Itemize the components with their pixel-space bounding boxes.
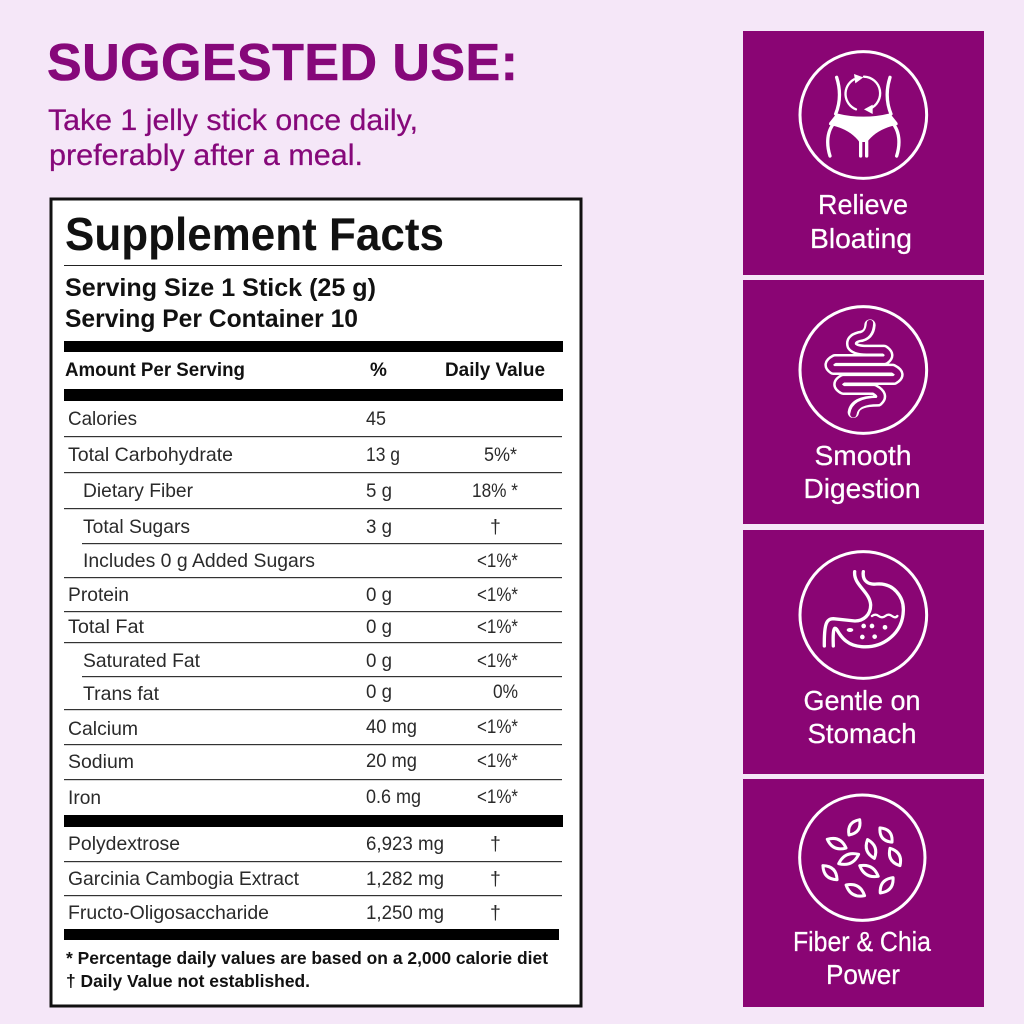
panel: smooth digestion [743, 280, 984, 524]
panel: fiber and chia power [743, 779, 984, 1007]
label: Stomach [808, 718, 916, 749]
nutrient rows: Dietary Fiber [83, 480, 193, 502]
nutrient rows: <1%* [477, 786, 518, 808]
label: Digestion [804, 473, 920, 504]
panel: supplement facts [51, 199, 581, 1006]
nutrient rows: 20 mg [366, 750, 417, 772]
label: Fiber & Chia [793, 926, 931, 957]
nutrient rows: † [490, 868, 501, 890]
nutrient rows: 0.6 mg [366, 786, 421, 808]
nutrient rows: 1,282 mg [366, 868, 444, 890]
nutrient rows: Sodium [68, 751, 134, 773]
usage instructions: preferably after a meal. [49, 139, 363, 172]
nutrient rows: 45 [366, 408, 386, 430]
nutrient rows: Total Sugars [83, 516, 190, 538]
nutrient rows: 0% [493, 681, 518, 703]
nutrient rows: 3 g [366, 516, 392, 538]
nutrient rows: 0 g [366, 584, 392, 606]
nutrient rows: Fructo-Oligosaccharide [68, 902, 269, 924]
panel: gentle on stomach [743, 530, 984, 774]
nutrient rows: Polydextrose [68, 833, 180, 855]
label: Relieve [818, 189, 908, 220]
nutrient rows: 5%* [484, 444, 517, 466]
serving information: Serving Size 1 Stick (25 g) [65, 274, 376, 302]
nutrient rows: 1,250 mg [366, 902, 444, 924]
nutrient rows [68, 408, 518, 924]
nutrient rows: † [490, 516, 501, 538]
panel: relieve bloating [743, 31, 984, 275]
nutrient rows: Total Carbohydrate [68, 444, 233, 466]
nutrient rows: Saturated Fat [83, 650, 201, 672]
nutrient rows: Garcinia Cambogia Extract [68, 868, 300, 890]
nutrient rows: <1%* [477, 716, 518, 738]
serving information [65, 274, 376, 333]
nutrient rows: 40 mg [366, 716, 417, 738]
footnotes [66, 948, 548, 991]
nutrient rows: Iron [68, 787, 101, 809]
label [804, 685, 920, 749]
nutrient rows: 5 g [366, 480, 392, 502]
nutrient rows: † [490, 902, 501, 924]
label [804, 440, 920, 504]
label [810, 189, 912, 254]
nutrient rows: 0 g [366, 681, 392, 703]
icon: chia seeds [800, 795, 925, 920]
table header: Amount Per Serving [65, 360, 245, 381]
nutrient rows: <1%* [477, 550, 518, 572]
table header: % [370, 360, 387, 381]
nutrient rows: Trans fat [83, 683, 160, 705]
nutrient rows: Total Fat [68, 616, 145, 638]
label: Smooth [814, 440, 912, 471]
icon: stomach [800, 552, 927, 678]
nutrient rows: 6,923 mg [366, 833, 444, 855]
nutrient rows: <1%* [477, 750, 518, 772]
icon: intestines [800, 307, 927, 433]
nutrient rows: <1%* [477, 616, 518, 638]
nutrient rows: 0 g [366, 650, 392, 672]
footnotes: * Percentage daily values are based on a 2,000 calorie diet [66, 948, 548, 968]
nutrient rows: Protein [68, 584, 129, 606]
label [793, 926, 931, 990]
nutrient rows: 13 g [366, 444, 400, 466]
label: Power [826, 959, 900, 990]
label: Bloating [810, 223, 912, 254]
usage instructions [48, 104, 418, 172]
serving information: Serving Per Container 10 [65, 305, 358, 333]
nutrient rows: 18% * [472, 480, 518, 502]
nutrient rows: Calcium [68, 718, 138, 740]
nutrient rows: † [490, 833, 501, 855]
nutrient rows: 0 g [366, 616, 392, 638]
facts heading: Supplement Facts [65, 208, 444, 260]
nutrient rows: Calories [68, 408, 137, 430]
table header: Daily Value [445, 360, 545, 381]
nutrient rows: <1%* [477, 650, 518, 672]
nutrient rows: Includes 0 g Added Sugars [83, 550, 315, 572]
footnotes: † Daily Value not established. [66, 971, 310, 991]
label: Gentle on [804, 685, 920, 716]
table header [65, 360, 545, 381]
icon: waist with circular arrows [800, 52, 927, 178]
nutrient rows: <1%* [477, 584, 518, 606]
title: SUGGESTED USE: [47, 34, 518, 92]
usage instructions: Take 1 jelly stick once daily, [48, 104, 418, 137]
